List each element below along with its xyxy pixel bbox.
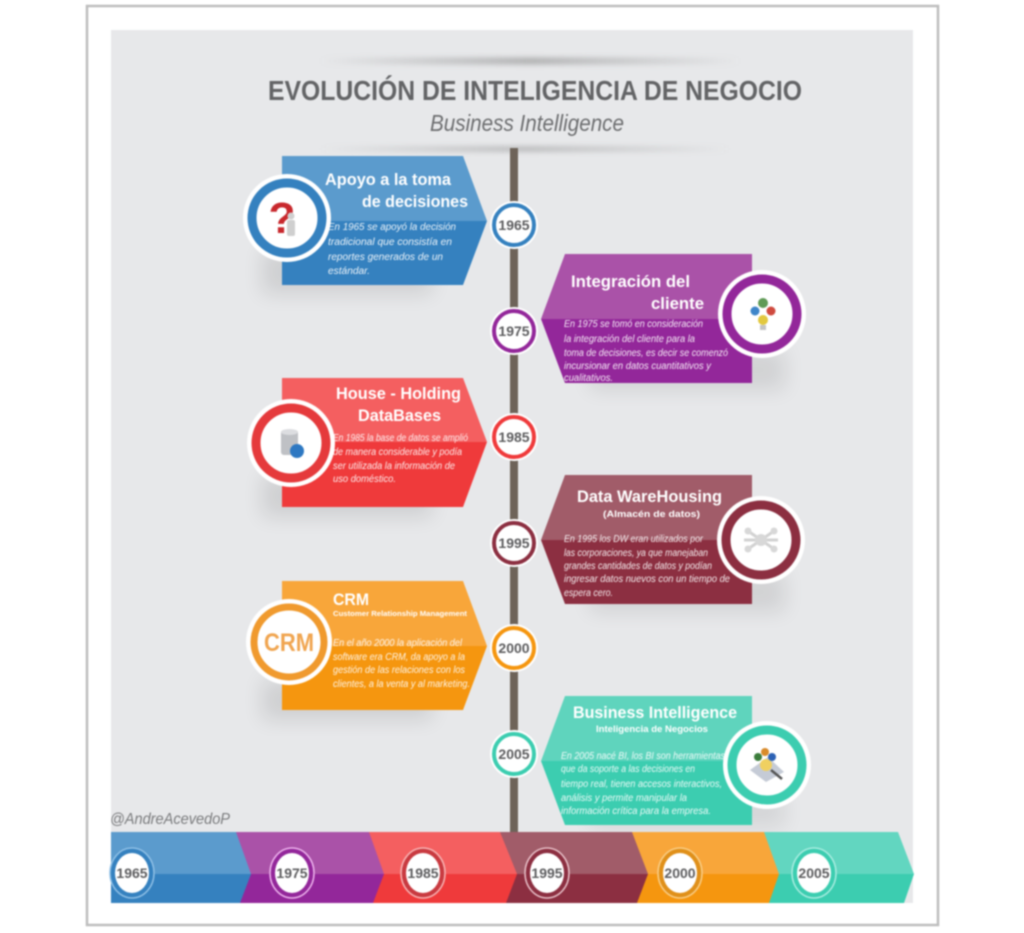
body text 1975: incursionar en datos cuantitativos y [564,361,712,372]
panel: 1985 house holding databases: House - Holding [336,384,461,403]
icon: question mark: ? [269,194,295,243]
body text 1965: reportes generados de un [328,252,443,263]
body text 1975: cualitativos. [564,373,613,384]
panel: 2000 CRM: CRM [333,590,369,609]
panel: 1965 decision support: de decisiones [362,192,468,211]
year marker 2005 [490,730,538,778]
panel: 1975 customer integration: cliente [651,294,704,313]
band marker 2005: 2005 [798,865,830,881]
year marker 1985: 1985 [498,429,530,445]
band marker 1985: 1985 [407,865,439,881]
band marker 1975 [270,848,314,898]
body text 1965 [328,222,456,277]
band marker 2000: 2000 [664,865,696,881]
band marker 1965: 1965 [116,865,148,881]
band marker 1995: 1995 [531,865,563,881]
body text 1985: ser utilizada la información de [333,461,455,472]
year marker 1975 [490,307,538,355]
body text 2000: gestión de las relaciones con los [333,665,465,676]
body text 1995: En 1995 los DW eran utilizados por [564,534,704,545]
panel: 2005 business intelligence: Inteligencia de Negocios [596,724,708,734]
panel: 1965 decision support: Apoyo a la toma [325,170,452,189]
year marker 2000: 2000 [498,640,530,656]
band marker 1965 [110,848,154,898]
panel: 1985 house holding databases [247,378,487,517]
panel: 2005 business intelligence: Business Intelligence [573,703,737,722]
body text 1985: En 1985 la base de datos se amplió [333,433,468,444]
body text 1965: estándar. [328,266,370,277]
icon: people and magnifier [723,721,811,809]
panel: 1995 data warehousing: (Almacén de datos) [603,509,700,519]
panel: 1975 customer integration: Integración del [571,272,690,291]
body text 1975: En 1975 se tomó en consideración [564,319,703,330]
icon: database with globe [247,399,335,487]
body text 2005: análisis y permite manipular la [561,793,687,804]
band marker 1975: 1975 [276,865,308,881]
body text 2005: tiempo real, tienen accesos interactivos, [561,779,722,790]
body text 1995: ingresar datos nuevos con un tiempo de [564,574,730,585]
icon: connected customers [718,270,806,358]
icon: data network [717,496,805,584]
panel: 1975 customer integration [541,254,806,390]
icon: CRM badge: CRM [264,629,314,657]
timeline spine [510,148,518,834]
body text 1995: espera cero. [564,588,613,599]
band marker 2005 [792,848,836,898]
body text 1985: uso doméstico. [333,474,396,485]
body text 1975 [564,319,728,384]
panel: 1965 decision support [243,156,487,294]
grey background panel [111,30,913,903]
band marker 1995 [525,848,569,898]
body text 2005: información crítica para la empresa. [561,806,711,817]
year marker 1985 [490,413,538,461]
author handle: @AndreAcevedoP [110,811,230,828]
year marker 1995 [490,519,538,567]
body text 2000 [333,638,470,690]
year marker 2005: 2005 [498,746,530,762]
band marker 1985 [401,848,445,898]
panel: 2000 CRM [246,581,487,720]
body text 1975: toma de decisiones, es decir se comenzó [564,348,728,359]
year marker 1965: 1965 [498,217,530,233]
body text 1965: tradicional que consistía en [328,237,452,248]
bottom timeline band [110,832,914,903]
title block: Business Intelligence [430,110,624,136]
body text 1985 [333,433,468,485]
body text 2005: que da soporte a las decisiones en [561,764,695,775]
icon: CRM badge [246,599,332,685]
body text 1995: las corporaciones, ya que manejaban [564,548,708,559]
body text 2005 [561,751,725,817]
title block: EVOLUCIÓN DE INTELIGENCIA DE NEGOCIO [268,75,802,106]
body text 1985: de manera considerable y podía [333,447,462,458]
panel: 1995 data warehousing: Data WareHousing [577,487,722,506]
panel: 1995 data warehousing [541,475,805,612]
panel: 1985 house holding databases: DataBases [358,406,441,425]
body text 2000: software era CRM, da apoyo a la [333,652,465,663]
panel: 2005 business intelligence [541,696,811,827]
body text 1965: En 1965 se apoyó la decisión [328,222,456,233]
body text 1995 [564,534,730,599]
body text 2000: En el año 2000 la aplicación del [333,638,463,649]
icon: question mark [243,174,331,262]
year marker 2000 [490,624,538,672]
band marker 2000 [658,848,702,898]
title block [268,58,802,151]
body text 2000: clientes, a la venta y al marketing. [333,679,470,690]
body text 1995: grandes cantidades de datos y podían [564,561,712,572]
body text 1975: la integración del cliente para la [564,334,695,345]
panel: 2000 CRM: Customer Relationship Management [333,611,468,618]
year marker 1995: 1995 [498,535,530,551]
year marker 1965 [490,201,538,249]
body text 2005: En 2005 nacé BI, los BI son herramientas [561,751,725,762]
year marker 1975: 1975 [498,323,530,339]
